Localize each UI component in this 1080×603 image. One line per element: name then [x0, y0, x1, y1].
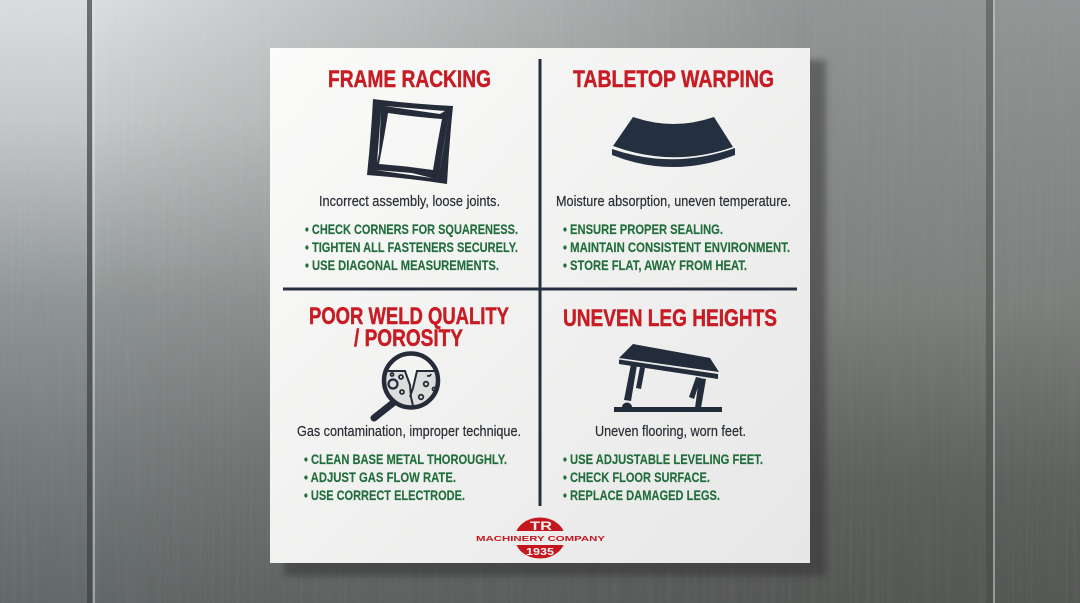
list: fixes: [305, 221, 518, 273]
list: fixes: • CHECK FLOOR SURFACE.: [563, 469, 710, 485]
list: fixes: • USE DIAGONAL MEASUREMENTS.: [305, 257, 499, 273]
logo: TR Machinery Company 1935: TR: [530, 521, 553, 533]
logo: TR Machinery Company 1935: 1935: [526, 547, 555, 558]
list: fixes: • STORE FLAT, AWAY FROM HEAT.: [563, 257, 747, 273]
heading: tabletop warping: TABLETOP WARPING: [573, 67, 774, 93]
description: causes: Uneven flooring, worn feet.: [595, 424, 746, 440]
panel: poor weld quality: [297, 304, 521, 503]
list: fixes: [563, 221, 790, 273]
list: fixes: • ENSURE PROPER SEALING.: [563, 221, 723, 237]
description: causes: Gas contamination, improper technique.: [297, 424, 521, 440]
heading: poor weld quality: POOR WELD QUALITY: [309, 304, 509, 330]
heading: uneven leg heights: UNEVEN LEG HEIGHTS: [563, 306, 777, 332]
list: fixes: • CLEAN BASE METAL THOROUGHLY.: [304, 451, 507, 467]
list: fixes: [304, 451, 507, 503]
list: fixes: • REPLACE DAMAGED LEGS.: [563, 487, 720, 503]
logo: TR Machinery Company 1935: [476, 518, 605, 558]
description: causes: Incorrect assembly, loose joints.: [319, 194, 500, 210]
poster shadow: [284, 60, 826, 576]
panel: tabletop warping: [556, 67, 791, 273]
heading: frame racking: FRAME RACKING: [328, 67, 491, 93]
poster panel: [270, 48, 810, 563]
panel: frame racking: [305, 67, 518, 273]
heading: poor weld quality: [309, 304, 509, 352]
icon: magnifier with porous weld: [374, 354, 440, 418]
list: fixes: • TIGHTEN ALL FASTENERS SECURELY.: [305, 239, 518, 255]
list: fixes: [563, 451, 763, 503]
dividers: [283, 59, 797, 506]
list: fixes: • USE CORRECT ELECTRODE.: [304, 487, 465, 503]
list: fixes: • USE ADJUSTABLE LEVELING FEET.: [563, 451, 763, 467]
list: fixes: • MAINTAIN CONSISTENT ENVIRONMENT.: [563, 239, 790, 255]
icon: uneven table: [614, 344, 722, 412]
list: fixes: • CHECK CORNERS FOR SQUARENESS.: [305, 221, 518, 237]
icon: racked frame: [367, 99, 453, 184]
list: fixes: • ADJUST GAS FLOW RATE.: [304, 469, 456, 485]
icon: warped tabletop: [612, 117, 735, 167]
heading: poor weld quality: / POROSITY: [354, 326, 463, 352]
panel: uneven leg heights: [563, 306, 777, 503]
description: causes: Moisture absorption, uneven temperature.: [556, 194, 791, 210]
logo: TR Machinery Company 1935: MACHINERY COMPANY: [476, 534, 605, 543]
